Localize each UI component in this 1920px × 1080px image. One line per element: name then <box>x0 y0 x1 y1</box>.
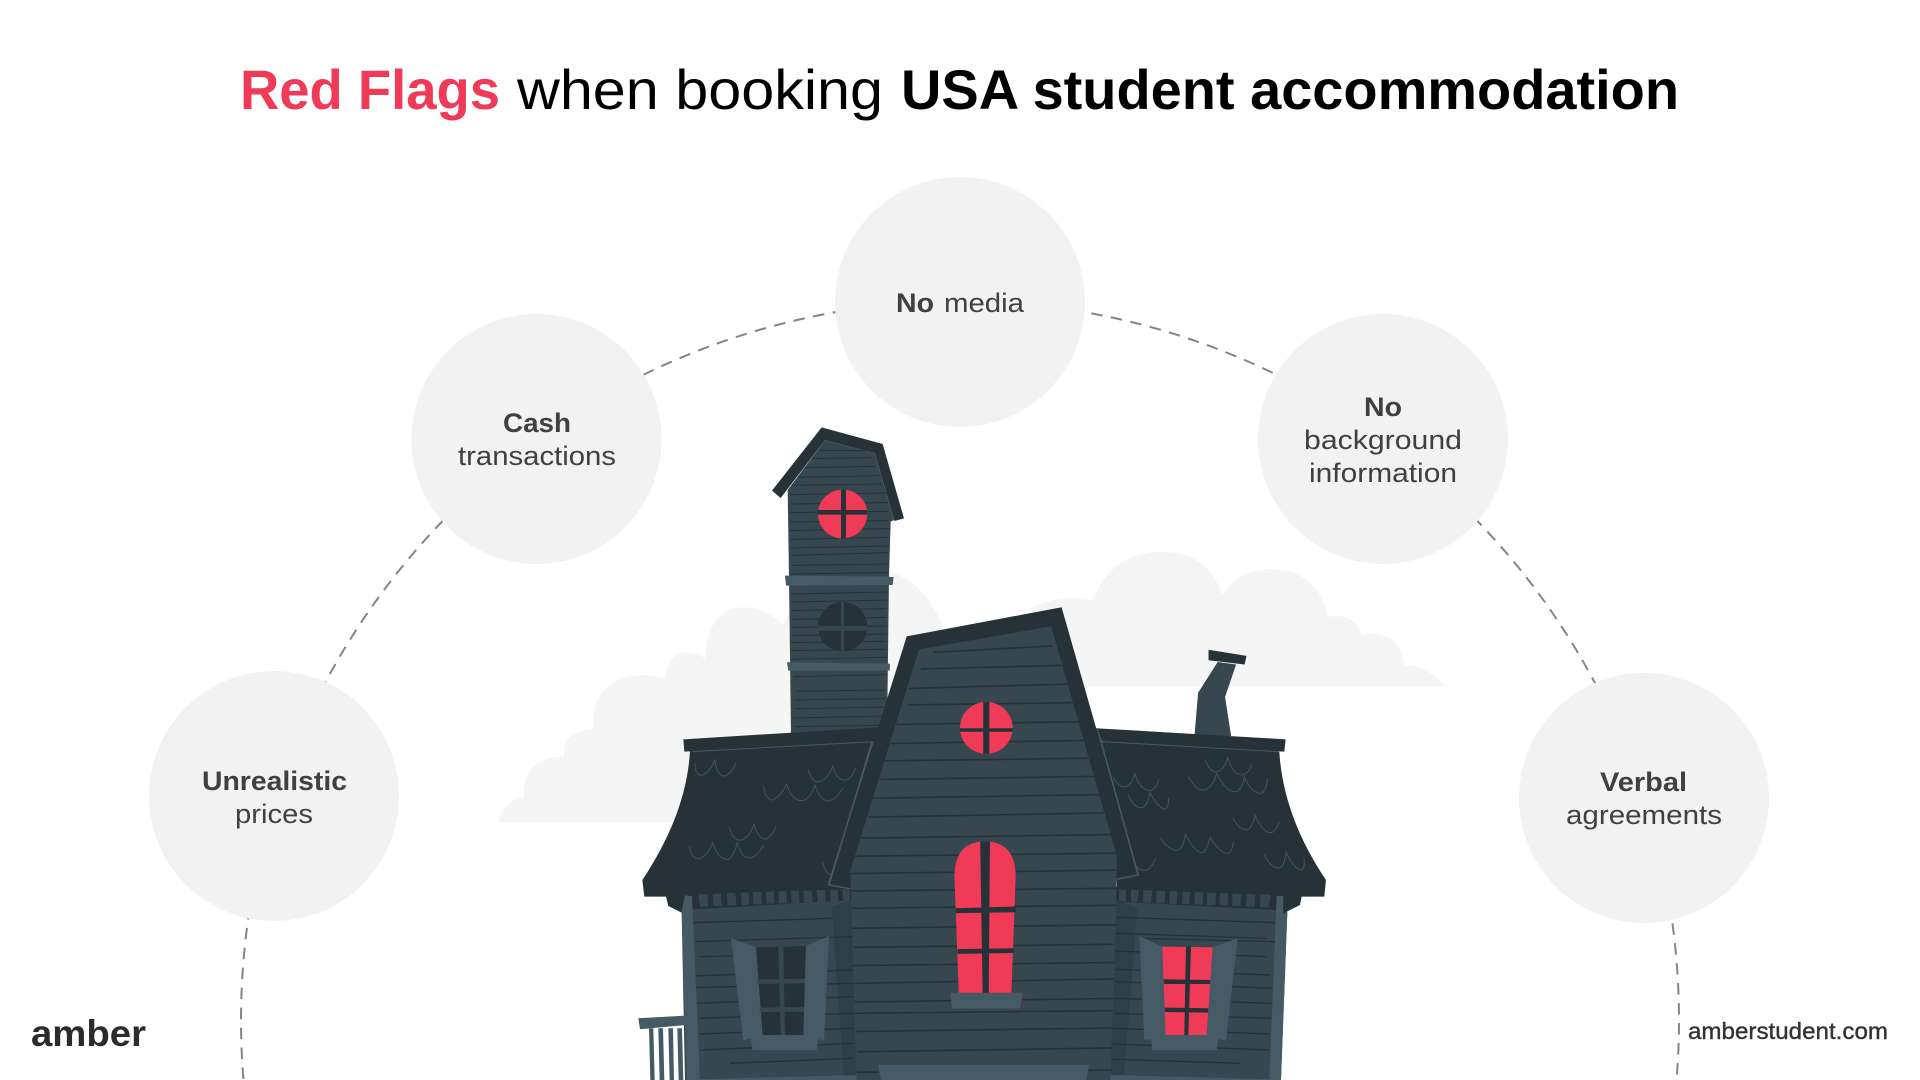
central round red window <box>960 702 1013 754</box>
circle: Unrealistic prices: prices <box>235 799 313 829</box>
circle: No media <box>835 177 1085 427</box>
tower red round window <box>818 490 867 538</box>
circle: Verbal agreements: Verbal <box>1600 767 1687 797</box>
porch roof top <box>878 1065 1089 1080</box>
circle: No background information: No <box>1364 392 1402 422</box>
roof shingle scallops left <box>689 759 855 875</box>
circle: Cash transactions: transactions <box>458 441 616 471</box>
circle: No media: No <box>896 288 934 318</box>
roof shingle scallops right <box>1113 757 1304 870</box>
window sill <box>950 993 1023 1008</box>
title: Red Flags <box>240 58 500 121</box>
circle: Unrealistic prices: Unrealistic <box>202 766 347 796</box>
tower dark round window <box>818 602 867 651</box>
central arched red window <box>954 842 1016 993</box>
title: USA student accommodation <box>901 58 1679 121</box>
left wing <box>638 727 878 1080</box>
circle: Verbal agreements: agreements <box>1566 800 1722 830</box>
circle: No background information <box>1258 314 1508 564</box>
right wing red window <box>1139 936 1238 1050</box>
right wing <box>1078 727 1326 1080</box>
circle: Cash transactions <box>412 314 662 564</box>
title: when booking <box>516 58 883 121</box>
left wing dark window <box>731 936 829 1050</box>
circle: No background information: background <box>1304 425 1462 455</box>
circle: No media: media <box>944 288 1025 318</box>
dashed arc connecting the red flags <box>241 301 1679 1079</box>
title <box>240 58 1679 121</box>
central gable <box>829 607 1138 1080</box>
amber logo: amber <box>31 1013 146 1054</box>
haunted house illustration <box>638 427 1326 1080</box>
chimney <box>1194 650 1246 736</box>
clouds behind the house <box>498 552 1445 822</box>
website: amberstudent.com <box>1688 1018 1888 1044</box>
porch railing <box>638 1016 690 1080</box>
tower <box>772 427 904 737</box>
circle: No background information: information <box>1309 458 1457 488</box>
circle: Unrealistic prices <box>149 671 399 921</box>
circle: Cash transactions: Cash <box>503 408 571 438</box>
circle: Verbal agreements <box>1519 673 1769 923</box>
